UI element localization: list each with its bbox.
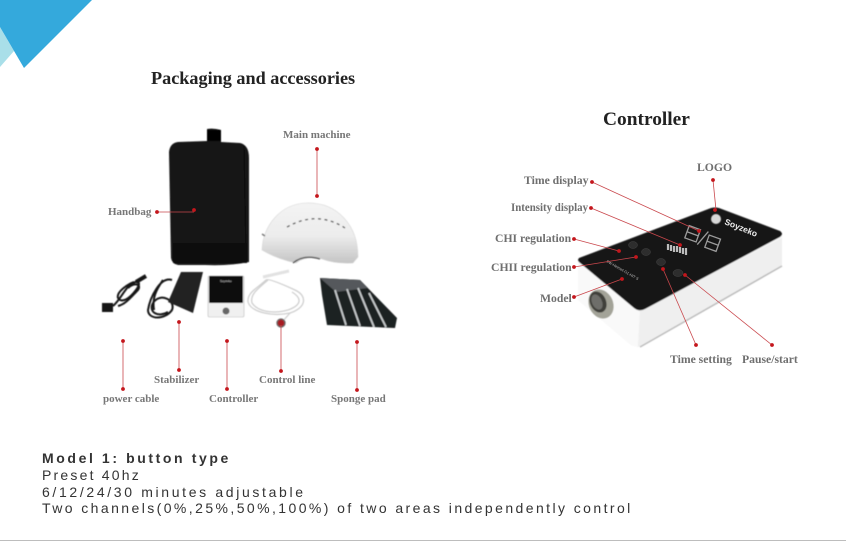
label: chii regulation: CHII regulation: [491, 261, 572, 274]
label: chi regulation: [495, 232, 621, 253]
label: time display: Time display: [524, 174, 589, 187]
text block: model specifications: Model 1: button type: [42, 450, 231, 466]
label: model: Model: [540, 292, 573, 305]
text block: model specifications: Two channels(0%,25%,50%,100%) of two areas independently control: [42, 500, 633, 516]
buttons: [628, 242, 683, 276]
connector port: [584, 285, 618, 323]
label: controller: Controller: [209, 393, 258, 405]
icon: handbag: [169, 129, 249, 265]
heading: controller: Controller: [603, 109, 690, 130]
label: control line: Control line: [259, 374, 315, 386]
label: chii regulation: [491, 255, 638, 274]
icon: stabilizer: [148, 272, 203, 318]
label: controller: [209, 339, 258, 405]
label: stabilizer: [154, 320, 199, 386]
icon: sponge pad: [320, 278, 397, 328]
label: pause/start: [683, 273, 798, 366]
label: handbag: Handbag: [108, 206, 152, 218]
text block: model specifications: [42, 450, 633, 516]
model text: SW-Helmet-G1-HIT S: [606, 259, 640, 281]
icon: small controller: [208, 276, 244, 317]
heading: packaging and accessories: Packaging and accessories: [151, 68, 355, 88]
corner decoration: [0, 0, 92, 68]
panel: accessories photo: [102, 129, 397, 405]
label: time display: [524, 174, 701, 233]
intensity bars: [668, 244, 686, 255]
label: logo: [697, 161, 732, 212]
label: intensity display: Intensity display: [511, 201, 588, 214]
label: main machine: [283, 129, 351, 198]
label: time setting: Time setting: [670, 353, 732, 366]
bottom rule: [0, 540, 846, 541]
brand logo: Soyzeko: [723, 217, 759, 239]
label: chi regulation: CHI regulation: [495, 232, 572, 245]
label: power cable: power cable: [103, 393, 159, 405]
icon: small controller: Soyzeko: [220, 279, 232, 283]
label: logo: LOGO: [697, 161, 732, 174]
text block: model specifications: 6/12/24/30 minutes adjustable: [42, 484, 306, 500]
label: sponge pad: Sponge pad: [331, 393, 386, 405]
brand logo: [711, 214, 759, 239]
icon: power cable: [102, 276, 146, 312]
digit display: [684, 225, 722, 251]
device body: [578, 208, 782, 347]
label: main machine: Main machine: [283, 129, 351, 141]
label: handbag: [108, 206, 196, 218]
label: intensity display: [511, 201, 682, 247]
icon: helmet main machine: [262, 203, 358, 263]
label: sponge pad: [331, 340, 386, 405]
label: time setting: [661, 267, 732, 366]
label: model: [540, 277, 624, 305]
label: pause/start: Pause/start: [742, 353, 798, 366]
label: power cable: [103, 339, 159, 405]
text block: model specifications: Preset 40hz: [42, 467, 141, 483]
label: control line: [259, 325, 315, 386]
label: stabilizer: Stabilizer: [154, 374, 199, 386]
panel: controller photo: [491, 161, 798, 366]
icon: control line: [248, 271, 304, 327]
